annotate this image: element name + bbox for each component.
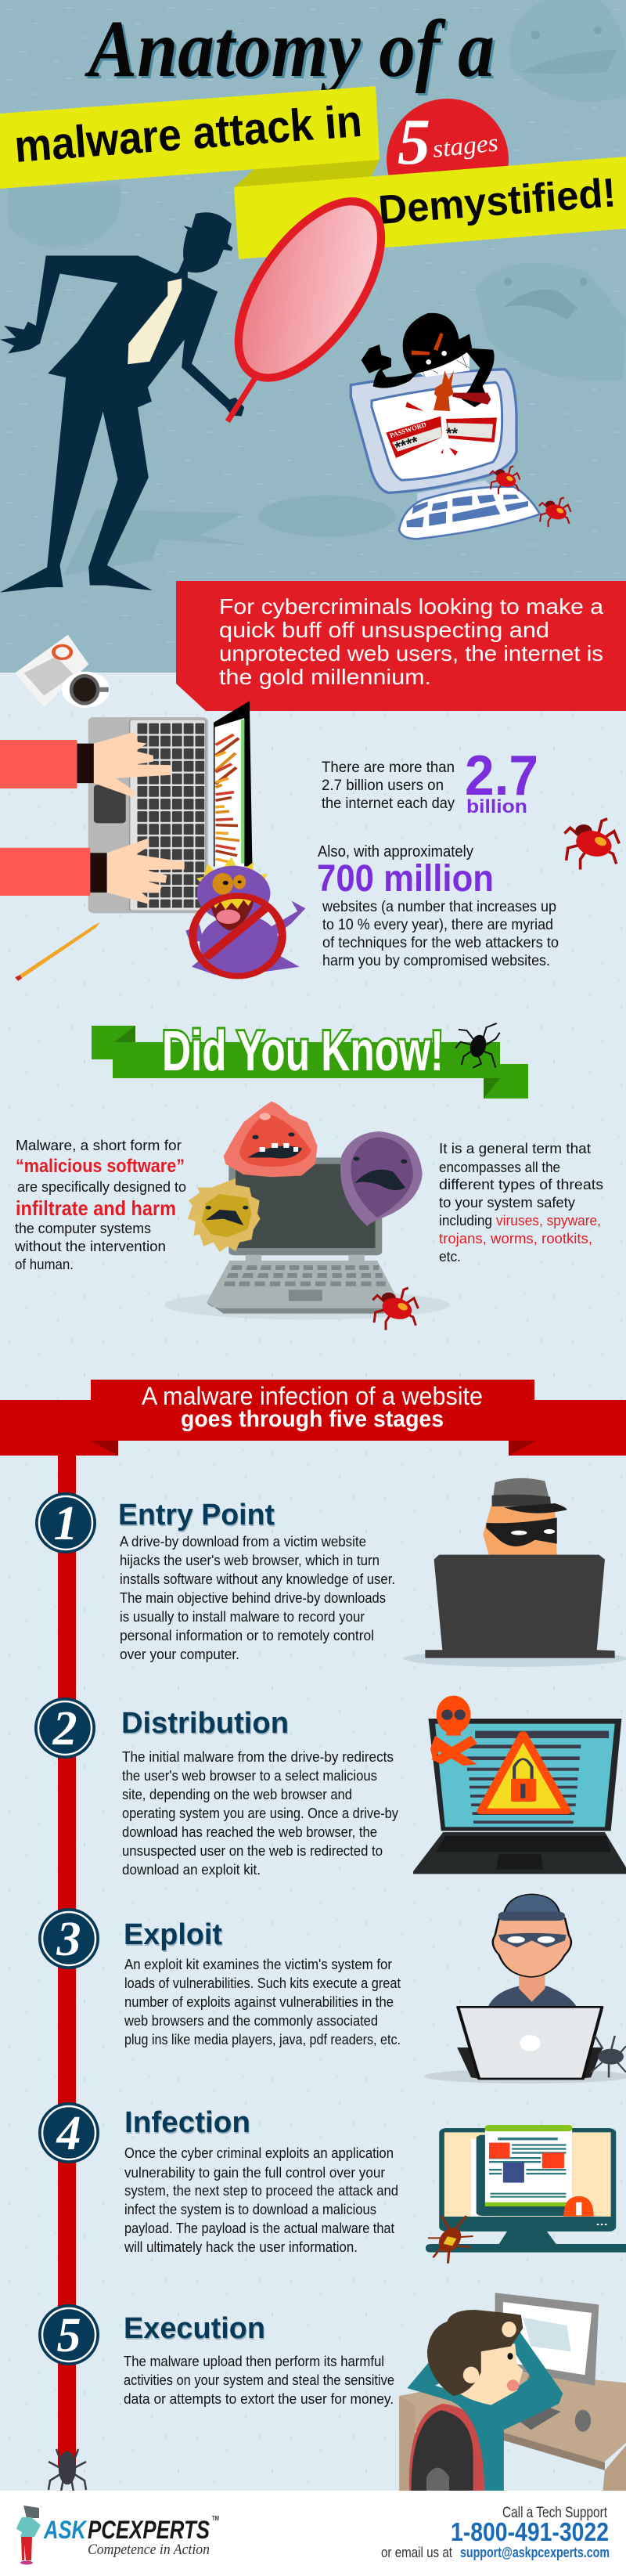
monster with prohibition sign — [185, 857, 305, 976]
did you know left text: without the intervention — [14, 1239, 166, 1254]
stage 5: text — [124, 2354, 394, 2407]
stage 5: heading: Execution — [124, 2312, 265, 2345]
did you know left text: infiltrate and harm — [16, 1196, 176, 1220]
stage 3: text: number of exploits against vulnerabilities in the — [124, 1994, 394, 2010]
stage 2: text: site, depending on the web browser and — [122, 1787, 352, 1802]
badge: 5 stages — [387, 99, 509, 221]
computer with hacker: **** — [394, 434, 421, 456]
stage 2: text — [122, 1749, 398, 1878]
computer with hacker: PASSWORD — [389, 420, 427, 439]
stat: 2.7 billion text: 2.7 billion users on — [322, 777, 444, 794]
title: Anatomy of a — [85, 4, 495, 94]
man ground shadow — [64, 496, 396, 575]
laptop with hands — [0, 701, 252, 913]
stage 4: text: system, the next step to proceed the attack and — [124, 2183, 398, 2199]
stage 4: heading: Infection — [124, 2106, 250, 2139]
stage 4: text: payload. The payload is the actual malware that — [124, 2221, 394, 2236]
stage 2: text: the user's web browser to a select malicious — [122, 1768, 377, 1784]
logo wordmark: ASK — [43, 2516, 88, 2544]
red bugs on computer — [490, 466, 571, 527]
stat: 2.7 billion text: the internet each day — [322, 796, 455, 812]
logo wordmark: PCEXPERTS — [88, 2516, 210, 2544]
stat: 700 million: Also, with approximately — [318, 843, 473, 860]
badge: 5 stages: 5 — [398, 106, 430, 179]
did you know left text: “malicious software” — [16, 1156, 185, 1177]
stage 4: infected monitor — [426, 2125, 626, 2264]
stat: 2.7 billion text — [322, 759, 455, 812]
footer background — [0, 2491, 626, 2576]
stage 1: text: personal information or to remotely control — [120, 1628, 374, 1643]
stage 5: number: 5 — [56, 2309, 81, 2362]
icon: red bug on grey laptop — [372, 1288, 418, 1330]
stat: 700 million: harm you by compromised websites. — [322, 953, 550, 969]
did you know right text: viruses, spyware, — [496, 1213, 601, 1228]
grey laptop with three malware monsters — [164, 1102, 451, 1319]
logo wordmark: Competence in Action — [88, 2542, 210, 2558]
red callout: unprotected web users, the internet is — [219, 641, 603, 666]
stage 3: text: loads of vulnerabilities. Such kits execute a great — [124, 1975, 401, 1991]
did you know left text — [14, 1138, 186, 1272]
stage 2: text: download an exploit kit. — [122, 1862, 261, 1878]
stage 3: heading: Exploit — [124, 1918, 222, 1951]
red callout: quick buff off unsuspecting and — [219, 618, 549, 642]
did you know right text: It is a general term that — [439, 1141, 591, 1156]
stage 1: masked hacker at laptop — [403, 1478, 626, 1667]
stage 2: text: The initial malware from the drive-by redirects — [122, 1749, 394, 1765]
detective silhouette — [0, 212, 244, 593]
computer with hacker — [351, 313, 540, 539]
stage 1: heading: Entry Point — [118, 1499, 275, 1532]
faint monster faces in background — [8, 0, 626, 381]
stage 4: text — [124, 2145, 398, 2255]
stage 4: text: will ultimately hack the user information. — [124, 2239, 358, 2255]
desk illustration: paper and coffee — [15, 635, 110, 708]
stat: 700 million: of techniques for the web attackers to — [322, 935, 559, 951]
stage 1: number — [35, 1492, 96, 1553]
red callout — [176, 581, 626, 711]
did you know right text: to your system safety — [439, 1195, 575, 1210]
background: upper teal area — [0, 0, 626, 673]
stat: 700 million: to 10 % every year), there are myriad — [322, 917, 553, 933]
stage 4: text: infect the system is to download a malicious — [124, 2202, 376, 2217]
did you know right text: different types of threats — [439, 1177, 603, 1192]
stage 5: text: activities on your system and steal the sensitive — [124, 2372, 394, 2388]
banner: malware attack in: malware attack in — [13, 96, 364, 172]
contact details: or email us at — [381, 2545, 452, 2560]
stat: 2.7 billion figure: 2.7 — [465, 745, 538, 807]
stage 3: hacker with silver laptop — [424, 1894, 626, 2084]
stage 5: number — [38, 2304, 99, 2365]
stage 1: text: is usually to install malware to record your — [120, 1609, 365, 1625]
stage 3: text: web browsers and the commonly associated — [124, 2013, 378, 2029]
logo figure — [16, 2506, 41, 2565]
stage 1: text — [120, 1534, 395, 1662]
stage 3: text: plug ins like media players, java, pdf readers, etc. — [124, 2032, 401, 2047]
stage 3: number — [38, 1908, 99, 1969]
stage 2: laptop with warning and skull — [413, 1696, 626, 1874]
logo wordmark — [43, 2515, 219, 2558]
red section ribbon: A malware infection of a website — [142, 1382, 483, 1410]
stage 1: text: The main objective behind drive-by downloads — [120, 1590, 386, 1606]
stat: 2.7 billion figure: billion — [466, 796, 527, 817]
badge: 5 stages: stages — [431, 128, 499, 163]
stat: 700 million — [317, 843, 559, 969]
stage 4: text: vulnerability to gain the full control over your — [124, 2165, 385, 2181]
stage 4: number — [38, 2102, 99, 2163]
stage 2: number — [34, 1697, 95, 1759]
stage 2: text: download has reached the web browser, the — [122, 1824, 377, 1840]
stage 1: text: hijacks the user's web browser, which in turn — [120, 1553, 380, 1568]
stage 2: number: 2 — [52, 1702, 77, 1755]
stage 3: text — [124, 1957, 401, 2047]
stage 1: text: installs software without any knowledge of user. — [120, 1571, 395, 1587]
stage 4: text: Once the cyber criminal exploits an application — [124, 2145, 394, 2161]
stage 2: text: operating system you are using. Once a drive-by — [122, 1806, 398, 1821]
icon: spider at bar end — [49, 2449, 86, 2491]
stage 2: heading: Distribution — [121, 1707, 289, 1740]
stage 2: text: unsuspected user on the web is redirected to — [122, 1843, 383, 1859]
logo wordmark: TM — [212, 2515, 219, 2522]
icon: black spider — [455, 1023, 500, 1068]
red section ribbon: goes through five stages — [181, 1406, 444, 1432]
background: lower pale area — [0, 673, 626, 2491]
did you know left text: Malware, a short form for — [16, 1138, 182, 1153]
stage 1: text: over your computer. — [120, 1647, 239, 1662]
vertical timeline bar — [58, 1456, 76, 2466]
stage 5: worried man at desk — [399, 2293, 626, 2491]
stage 5: text: The malware upload then perform its harmful — [124, 2354, 384, 2369]
contact details — [381, 2505, 610, 2560]
red callout: the gold millennium. — [219, 665, 431, 689]
did you know right text — [439, 1141, 603, 1265]
stage 5: text: data or attempts to extort the user for money. — [124, 2391, 394, 2407]
stat: 700 million: websites (a number that increases up — [322, 899, 556, 915]
did you know ribbon: Did You Know! — [162, 1020, 444, 1083]
pencil — [15, 922, 100, 981]
stat: 700 million: 700 million — [317, 858, 494, 900]
did you know right text: encompasses all the — [439, 1160, 560, 1175]
computer with hacker: ** — [446, 426, 459, 442]
did you know left text: are specifically designed to — [17, 1179, 186, 1195]
red section ribbon — [0, 1380, 626, 1456]
banner: Demystified: Demystified! — [377, 170, 617, 233]
stage 3: number: 3 — [56, 1913, 81, 1966]
stage 3: text: An exploit kit examines the victim's system for — [124, 1957, 392, 1972]
did you know left text: of human. — [15, 1257, 74, 1272]
did you know right text: trojans, worms, rootkits, — [439, 1231, 592, 1247]
stage 4: number: 4 — [56, 2107, 81, 2160]
stage 1: text: A drive-by download from a victim website — [120, 1534, 366, 1550]
did you know left text: the computer systems — [15, 1221, 151, 1236]
did you know ribbon — [92, 1020, 528, 1099]
stage 1: number: 1 — [53, 1497, 78, 1550]
stat: 2.7 billion text: There are more than — [322, 759, 455, 776]
red callout: For cybercriminals looking to make a — [219, 594, 603, 619]
magnifying glass — [210, 178, 409, 421]
did you know right text: including — [439, 1213, 492, 1228]
banner: Demystified — [234, 157, 626, 259]
icon: red spider — [564, 819, 619, 870]
did you know right text: etc. — [439, 1249, 461, 1265]
